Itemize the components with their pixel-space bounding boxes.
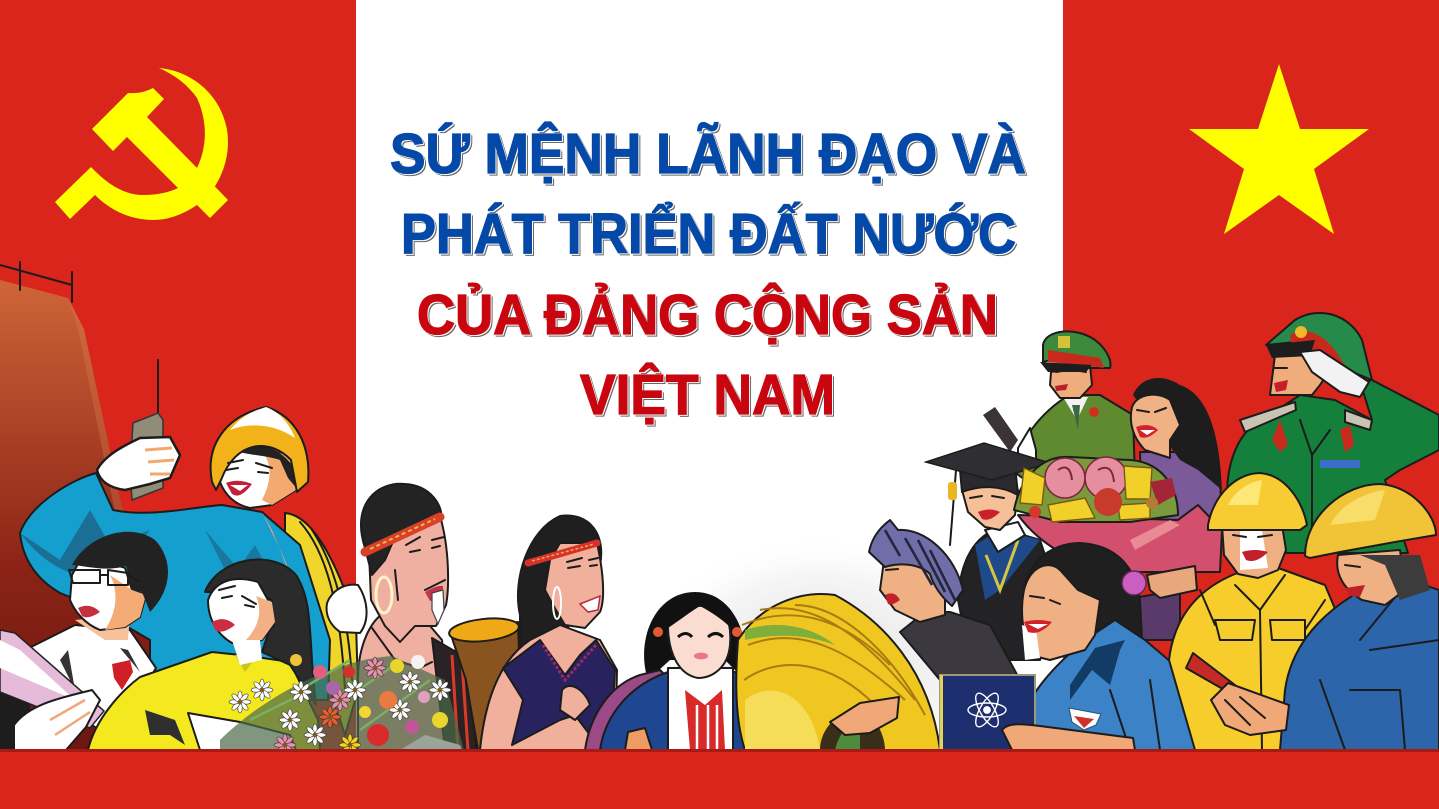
figure: young woman in blue uniform <box>1014 543 1196 750</box>
figure: woman in yellow ao dai <box>88 560 320 750</box>
illustration: power plant tower <box>0 262 150 750</box>
hand holding notebook <box>1211 683 1289 735</box>
icon: atom <box>968 690 1006 730</box>
hand holding cable <box>327 585 367 633</box>
white beard <box>432 590 444 624</box>
blue science book with atom icon <box>940 675 1035 750</box>
panel: white centre <box>356 0 1063 750</box>
title: SỨ MỆNH LÃNH ĐẠO VÀ <box>390 121 1026 186</box>
figure: worker with radio <box>20 360 367 735</box>
figure: graduate with cap <box>926 443 1060 660</box>
title <box>390 121 1026 427</box>
figure: student with glasses <box>0 532 168 750</box>
earring hoop <box>376 577 392 613</box>
figure: rice bundle <box>736 594 940 750</box>
flowers bouquet <box>220 654 464 756</box>
backpack <box>585 670 680 750</box>
bottom band <box>0 749 1439 809</box>
figure: basket <box>448 615 522 750</box>
figure: purple dress and hand behind <box>1139 566 1197 640</box>
figure: elder man with headband <box>358 484 476 750</box>
icon: hammer and sickle <box>55 68 228 220</box>
figure: woman holding bouquet <box>1131 378 1222 520</box>
figure: bouquet and wrap <box>1014 457 1222 572</box>
figure: schoolgirl with backpack <box>585 592 778 750</box>
icon: yellow star <box>1189 64 1369 234</box>
icon: radio <box>130 360 163 500</box>
figure: army officer saluting <box>1227 313 1439 553</box>
soft grey haze behind rice bundle <box>630 535 1010 805</box>
book roll <box>0 630 104 728</box>
saluting white glove <box>1300 350 1369 397</box>
title: CỦA ĐẢNG CỘNG SẢN <box>417 282 998 347</box>
red notebook <box>1186 653 1235 692</box>
figure: soldier green police officer <box>983 331 1135 480</box>
figure: worker in yellow uniform with hard hat <box>1169 473 1348 750</box>
figure: worker in blue with hard hat and red book <box>1186 484 1439 750</box>
badge <box>1069 708 1101 730</box>
hand over book <box>1002 724 1135 750</box>
figure: woman in turban <box>869 520 1020 700</box>
title: PHÁT TRIỂN ĐẤT NƯỚC <box>401 201 1016 266</box>
figure: woman with headband <box>480 516 617 750</box>
title: VIỆT NAM <box>580 362 835 427</box>
